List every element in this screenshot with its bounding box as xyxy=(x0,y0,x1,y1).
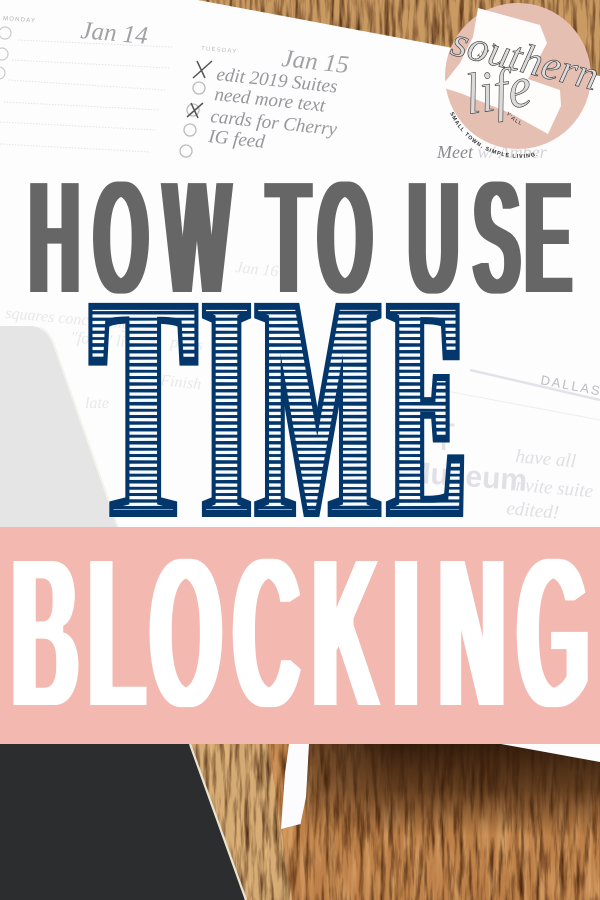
faded lower notes: "food" line xyxy=(70,329,141,352)
logo: tagline text: Y'ALL xyxy=(507,112,521,125)
logo: state silhouette xyxy=(441,8,561,134)
logo: script wordmark: southern xyxy=(447,19,600,100)
logo: tagline text: SMALL TOWN, SIMPLE LIVING. xyxy=(450,112,538,158)
wood table top right xyxy=(198,0,600,76)
tuesday column: Jan 15 xyxy=(280,45,350,79)
logo: pink watercolour circle xyxy=(445,3,591,149)
heading: time (hatched lettering) xyxy=(92,229,464,586)
meeting note: Meet w/ Amber xyxy=(436,142,548,162)
tuesday column: edit 2019 Suites xyxy=(215,64,338,98)
dallas planner page: invite suite xyxy=(510,474,594,502)
dallas planner page xyxy=(405,370,600,524)
monday column: Jan 14 xyxy=(79,17,149,50)
heading: how to use: HOW TO USE xyxy=(29,146,572,329)
faded lower notes: late xyxy=(85,395,109,412)
tuesday column xyxy=(180,45,350,157)
heading: time (hatched lettering): M xyxy=(258,229,379,585)
heading: time (hatched lettering): T xyxy=(92,231,195,585)
bookmark ribbon xyxy=(281,744,309,829)
faded lower notes xyxy=(5,259,279,412)
heading: time (hatched lettering): E xyxy=(390,229,464,585)
logo: script wordmark: life xyxy=(461,53,535,127)
dallas planner page: T xyxy=(432,417,455,459)
faded lower notes: Jan 16 xyxy=(235,259,279,280)
tuesday column: TUESDAY xyxy=(201,46,238,55)
tablet bottom left xyxy=(0,744,246,900)
tuesday column: need more text xyxy=(213,84,327,117)
logo: tagline text xyxy=(450,43,538,158)
dallas planner page: edited! xyxy=(506,498,560,524)
page corner bottom right xyxy=(501,744,600,762)
wood table bottom xyxy=(190,744,600,900)
faded lower notes: parts xyxy=(169,334,204,354)
faded lower notes: Finish xyxy=(159,372,202,393)
faded lower notes: squares concerning xyxy=(5,305,131,333)
heading: time (hatched lettering): I xyxy=(204,230,249,586)
heading: blocking: BLOCKING xyxy=(12,513,589,755)
logo badge xyxy=(445,3,600,158)
phone, faded behind overlay xyxy=(0,326,118,527)
pink banner xyxy=(0,527,600,744)
monday column xyxy=(0,16,172,152)
tuesday column: IG feed xyxy=(206,126,266,153)
planner page: handwritten notes xyxy=(0,16,600,524)
dallas planner page: have all xyxy=(515,446,577,472)
logo: tagline text: IT'S A xyxy=(475,43,497,62)
tuesday column: cards for Cherry xyxy=(209,106,339,140)
dallas planner page: Museum xyxy=(405,456,528,497)
monday column: MONDAY xyxy=(3,16,36,24)
